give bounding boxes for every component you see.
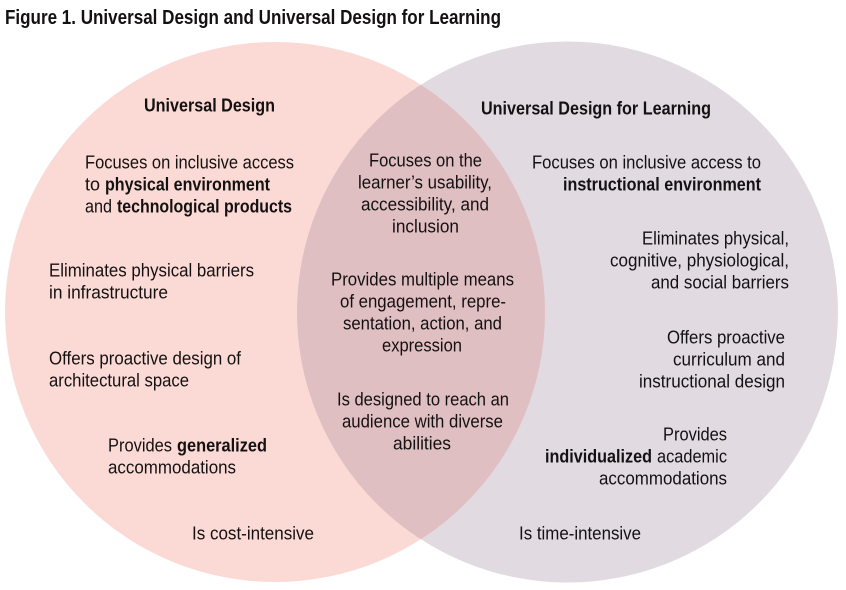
text: time-intensive: Is time-intensive: [519, 522, 641, 543]
text: eliminates physical barriers: [49, 259, 254, 302]
text: multiple means: [331, 268, 514, 355]
text: eliminates physical barriers: Eliminates physical barriers: [49, 259, 254, 280]
text: diverse abilities: Is designed to reach an: [337, 388, 509, 409]
text: cost-intensive: Is cost-intensive: [192, 522, 314, 543]
overlap region: [297, 85, 545, 539]
text: proactive curriculum: [639, 326, 785, 391]
text: learner's usability: learner’s usability,: [358, 171, 492, 192]
text: eliminates physical barriers: in infrastructure: [49, 281, 168, 302]
text: focuses on physical environment: [85, 151, 294, 216]
text: learner's usability: Focuses on the: [369, 149, 482, 170]
text: focuses on instructional environment: instructional environment: [563, 173, 761, 194]
text: individualized accommodations: individualized: [545, 445, 652, 466]
text: proactive curriculum: instructional design: [639, 370, 785, 391]
text: generalized accommodations: generalized: [177, 434, 267, 455]
heading: Universal Design: Universal Design: [144, 94, 275, 115]
text: diverse abilities: abilities: [393, 432, 451, 453]
text: learner's usability: accessibility, and: [361, 193, 489, 214]
text: proactive curriculum: curriculum and: [673, 348, 785, 369]
text: focuses on physical environment: technological products: [117, 195, 292, 216]
text: eliminates barriers: Eliminates physical,: [642, 227, 789, 248]
text: generalized accommodations: [108, 434, 267, 477]
text: generalized accommodations: accommodations: [108, 456, 236, 477]
panel: Universal Design for Learning items: [519, 151, 789, 543]
text: proactive architectural design: [49, 347, 242, 390]
text: individualized accommodations: academic: [657, 445, 727, 466]
text: eliminates barriers: [610, 227, 789, 292]
text: individualized accommodations: [545, 423, 727, 488]
text: proactive curriculum: Offers proactive: [667, 326, 785, 347]
text: learner's usability: [358, 149, 492, 236]
text: focuses on physical environment: physical environment: [105, 173, 270, 194]
text: individualized accommodations: accommodations: [599, 467, 727, 488]
text: focuses on instructional environment: [532, 151, 761, 194]
text: multiple means: expression: [382, 334, 462, 355]
title: Figure 1. Universal Design and Universal Design for Learning: [5, 6, 501, 29]
heading: Universal Design for Learning: Universal Design for Learning: [481, 97, 711, 118]
text: focuses on physical environment: Focuses on inclusive access: [85, 151, 294, 172]
text: focuses on instructional environment: Focuses on inclusive access to: [532, 151, 761, 172]
text: focuses on physical environment: to: [85, 173, 100, 194]
text: multiple means: of engagement, repre-: [340, 290, 506, 311]
text: focuses on physical environment: and: [85, 195, 112, 216]
text: multiple means: Provides multiple means: [331, 268, 514, 289]
text: diverse abilities: audience with diverse: [342, 410, 503, 431]
text: learner's usability: inclusion: [392, 215, 459, 236]
text: multiple means: sentation, action, and: [343, 312, 502, 333]
text: diverse abilities: [337, 388, 509, 453]
panel: Universal Design items: [49, 151, 314, 543]
text: proactive architectural design: architectural space: [49, 369, 189, 390]
text: eliminates barriers: and social barriers: [651, 271, 789, 292]
text: proactive architectural design: Offers proactive design of: [49, 347, 242, 368]
text: generalized accommodations: Provides: [108, 434, 172, 455]
text: individualized accommodations: Provides: [663, 423, 727, 444]
text: eliminates barriers: cognitive, physiological,: [610, 249, 789, 270]
panel: shared items: [331, 149, 514, 453]
circle: Universal Design for Learning: [297, 42, 838, 582]
circle: Universal Design: [5, 42, 545, 582]
